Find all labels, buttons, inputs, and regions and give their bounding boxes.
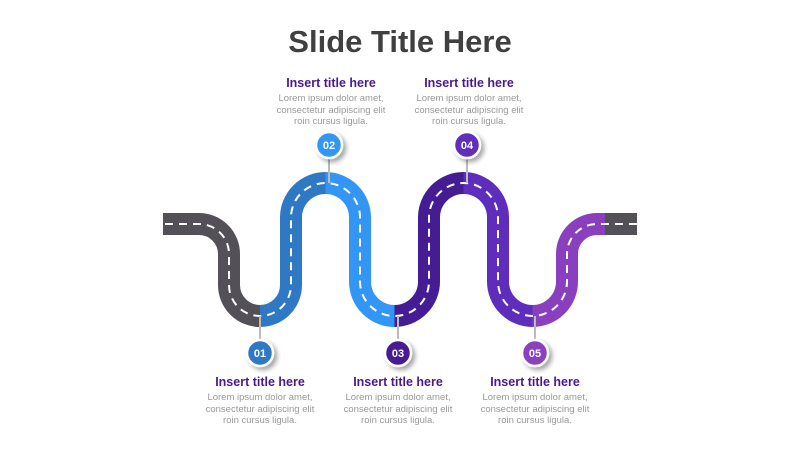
text 02: Insert title here xyxy=(286,76,376,90)
marker 05 xyxy=(522,340,548,366)
text 05: roin cursus ligula. xyxy=(498,415,572,426)
marker 03: 03 xyxy=(392,348,404,360)
text 05 xyxy=(481,375,590,426)
text 02: roin cursus ligula. xyxy=(294,116,368,127)
text 03: roin cursus ligula. xyxy=(361,415,435,426)
text 01: consectetur adipiscing elit xyxy=(206,404,314,414)
text 03: Insert title here xyxy=(353,375,443,389)
marker 02 xyxy=(316,132,342,158)
text 04: consectetur adipiscing elit xyxy=(415,104,523,116)
marker 04: 04 xyxy=(461,140,474,152)
marker 01 xyxy=(247,340,273,366)
text 04: roin cursus ligula. xyxy=(432,116,506,127)
marker 05: 05 xyxy=(529,348,541,360)
text 02: consectetur adipiscing elit xyxy=(277,104,385,116)
text 01: Insert title here xyxy=(215,375,305,389)
text 03: consectetur adipiscing elit xyxy=(344,404,452,414)
text 05: consectetur adipiscing elit xyxy=(481,404,589,414)
marker 01: 01 xyxy=(254,348,266,360)
text 01: Lorem ipsum dolor amet, xyxy=(207,392,313,403)
text 05: Insert title here xyxy=(490,375,580,389)
text 02 xyxy=(277,76,386,127)
marker 03 xyxy=(385,340,411,366)
marker 02: 02 xyxy=(323,140,335,152)
text 01 xyxy=(206,375,314,426)
marker 04 xyxy=(454,132,480,158)
text 04: Lorem ipsum dolor amet, xyxy=(416,93,522,104)
text 03 xyxy=(344,375,452,426)
text 04 xyxy=(415,76,524,127)
text 04: Insert title here xyxy=(424,76,514,90)
text 03: Lorem ipsum dolor amet, xyxy=(345,392,451,403)
text 01: roin cursus ligula. xyxy=(223,415,297,426)
text 05: Lorem ipsum dolor amet, xyxy=(482,392,588,403)
text 02: Lorem ipsum dolor amet, xyxy=(278,93,384,104)
title: Slide Title Here xyxy=(288,24,512,59)
